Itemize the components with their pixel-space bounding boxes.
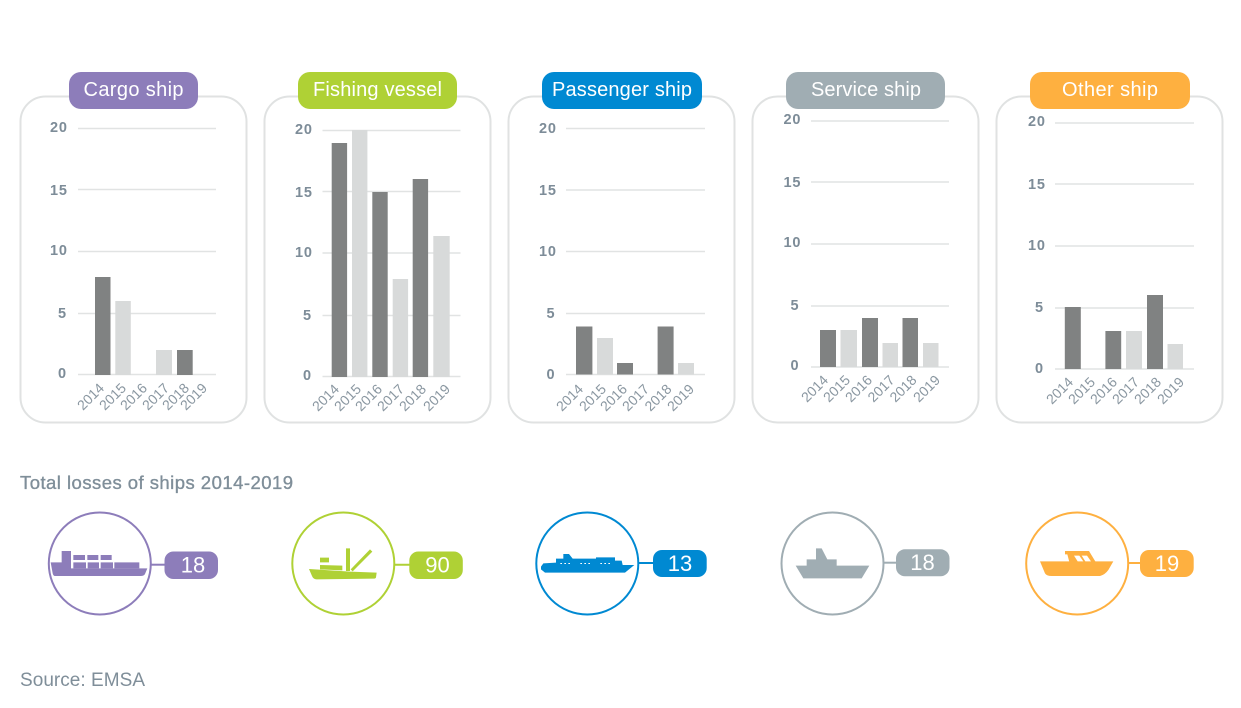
bar chart: service ship [784, 112, 949, 405]
bar chart: service ship: 2016 [842, 372, 875, 405]
section heading: Total losses of ships 2014-2019 [20, 472, 293, 493]
bar chart: passenger ship: 20 [539, 121, 557, 137]
bar chart: cargo ship: 2014 [74, 380, 107, 413]
badge: 18 [164, 552, 218, 579]
badge: 19: 19 [1155, 551, 1179, 576]
bar chart: other ship: 2014 [1043, 374, 1076, 407]
pill heading: other ship [1030, 72, 1190, 109]
bar chart: other ship [1028, 114, 1194, 407]
bar chart: passenger ship: 0 [546, 367, 555, 383]
bar chart: cargo ship: 2016 [117, 380, 150, 413]
bar chart: fishing vessel: 2018 [396, 381, 429, 414]
icon: cargo ship [51, 551, 147, 576]
total: fishing vessel [292, 512, 463, 614]
total: passenger ship [536, 512, 707, 614]
badge: 18: 18 [910, 550, 935, 575]
bar chart: other ship: 10 [1028, 238, 1046, 254]
bar chart: fishing vessel: 2017 [374, 381, 407, 414]
badge: 13 [653, 550, 707, 577]
total: other ship [1026, 512, 1194, 614]
badge: 18: 18 [181, 552, 205, 578]
panel: cargo ship [20, 72, 246, 422]
pill heading: passenger ship: Passenger ship [552, 79, 692, 101]
pill heading: cargo ship [69, 72, 198, 109]
total: service ship [782, 512, 950, 614]
bar chart: fishing vessel: 0 [303, 368, 312, 384]
bar chart: fishing vessel: 15 [295, 185, 313, 201]
pill heading: fishing vessel [298, 72, 457, 109]
bar chart: service ship: 2018 [886, 372, 920, 405]
bar chart: cargo ship: 20 [50, 120, 68, 136]
bar chart: service ship: 10 [784, 235, 801, 251]
bar chart: fishing vessel: 5 [303, 308, 312, 324]
bar chart: fishing vessel: 10 [295, 245, 313, 261]
bar chart: passenger ship: 2014 [553, 381, 586, 414]
bar chart: fishing vessel: 2014 [309, 381, 342, 414]
badge: 18 [896, 549, 950, 576]
bar chart: other ship: 15 [1028, 177, 1046, 193]
bar chart: other ship: 2015 [1065, 374, 1098, 407]
bar chart: service ship: 15 [784, 175, 801, 191]
panel: other ship [996, 72, 1222, 422]
bar chart: other ship: 2018 [1131, 374, 1164, 407]
source note: Source: EMSA [20, 670, 145, 691]
pill heading: service ship [786, 72, 945, 109]
bar chart: service ship: 20 [784, 112, 801, 128]
bar chart: passenger ship: 15 [539, 183, 557, 199]
panel: service ship [752, 72, 978, 422]
icon: service ship [796, 548, 869, 578]
bar chart: passenger ship [539, 121, 705, 414]
bar chart: other ship: 5 [1035, 300, 1044, 316]
bar chart: passenger ship: 5 [546, 306, 555, 322]
icon: passenger ship [541, 554, 634, 573]
bar chart: cargo ship: 2015 [96, 380, 129, 413]
icon: fishing vessel [309, 548, 377, 579]
bar chart: passenger ship: 10 [539, 244, 557, 260]
total: cargo ship [49, 512, 218, 614]
pill heading: cargo ship: Cargo ship [84, 79, 184, 101]
badge: 90: 90 [425, 552, 450, 578]
bar chart: cargo ship: 5 [58, 306, 67, 322]
bar chart: service ship: 2019 [910, 372, 943, 405]
bar chart: passenger ship: 2018 [641, 381, 675, 414]
bar chart: passenger ship: 2015 [576, 381, 609, 414]
bar chart: service ship: 0 [790, 358, 799, 374]
bar chart: cargo ship: 0 [58, 366, 67, 382]
bar chart: service ship: 5 [790, 298, 799, 314]
pill heading: other ship: Other ship [1062, 79, 1158, 101]
bar chart: cargo ship: 2017 [139, 380, 172, 413]
bar chart: passenger ship: 2017 [619, 381, 652, 414]
bar chart: fishing vessel: 2015 [331, 381, 364, 414]
bar chart: other ship: 2019 [1154, 374, 1187, 407]
pill heading: fishing vessel: Fishing vessel [313, 79, 442, 101]
panel: passenger ship [508, 72, 734, 422]
badge: 90 [409, 552, 463, 579]
bar chart: passenger ship: 2019 [664, 381, 697, 414]
bar chart: passenger ship: 2016 [597, 381, 630, 414]
bar chart: fishing vessel: 2019 [420, 381, 453, 414]
bar chart: cargo ship: 10 [50, 243, 68, 259]
bar chart: other ship: 20 [1028, 114, 1046, 130]
bar chart: fishing vessel: 2016 [352, 381, 385, 414]
panel: fishing vessel [264, 72, 490, 422]
badge: 19 [1140, 550, 1194, 577]
bar chart: fishing vessel: 20 [295, 122, 313, 138]
pill heading: passenger ship [542, 72, 702, 109]
bar chart: other ship: 2017 [1109, 374, 1142, 407]
pill heading: service ship: Service ship [811, 79, 921, 101]
bar chart: service ship: 2014 [798, 372, 831, 405]
icon: other ship [1040, 551, 1113, 576]
badge: 13: 13 [668, 551, 692, 576]
bar chart: fishing vessel [295, 122, 460, 414]
bar chart: cargo ship: 2018 [159, 380, 192, 413]
bar chart: other ship: 2016 [1087, 374, 1120, 407]
bar chart: service ship: 2015 [820, 372, 853, 405]
bar chart: service ship: 2017 [864, 372, 898, 405]
bar chart: cargo ship: 2019 [177, 380, 210, 413]
bar chart: cargo ship: 15 [50, 183, 68, 199]
bar chart: cargo ship [50, 120, 216, 413]
bar chart: other ship: 0 [1035, 361, 1044, 377]
